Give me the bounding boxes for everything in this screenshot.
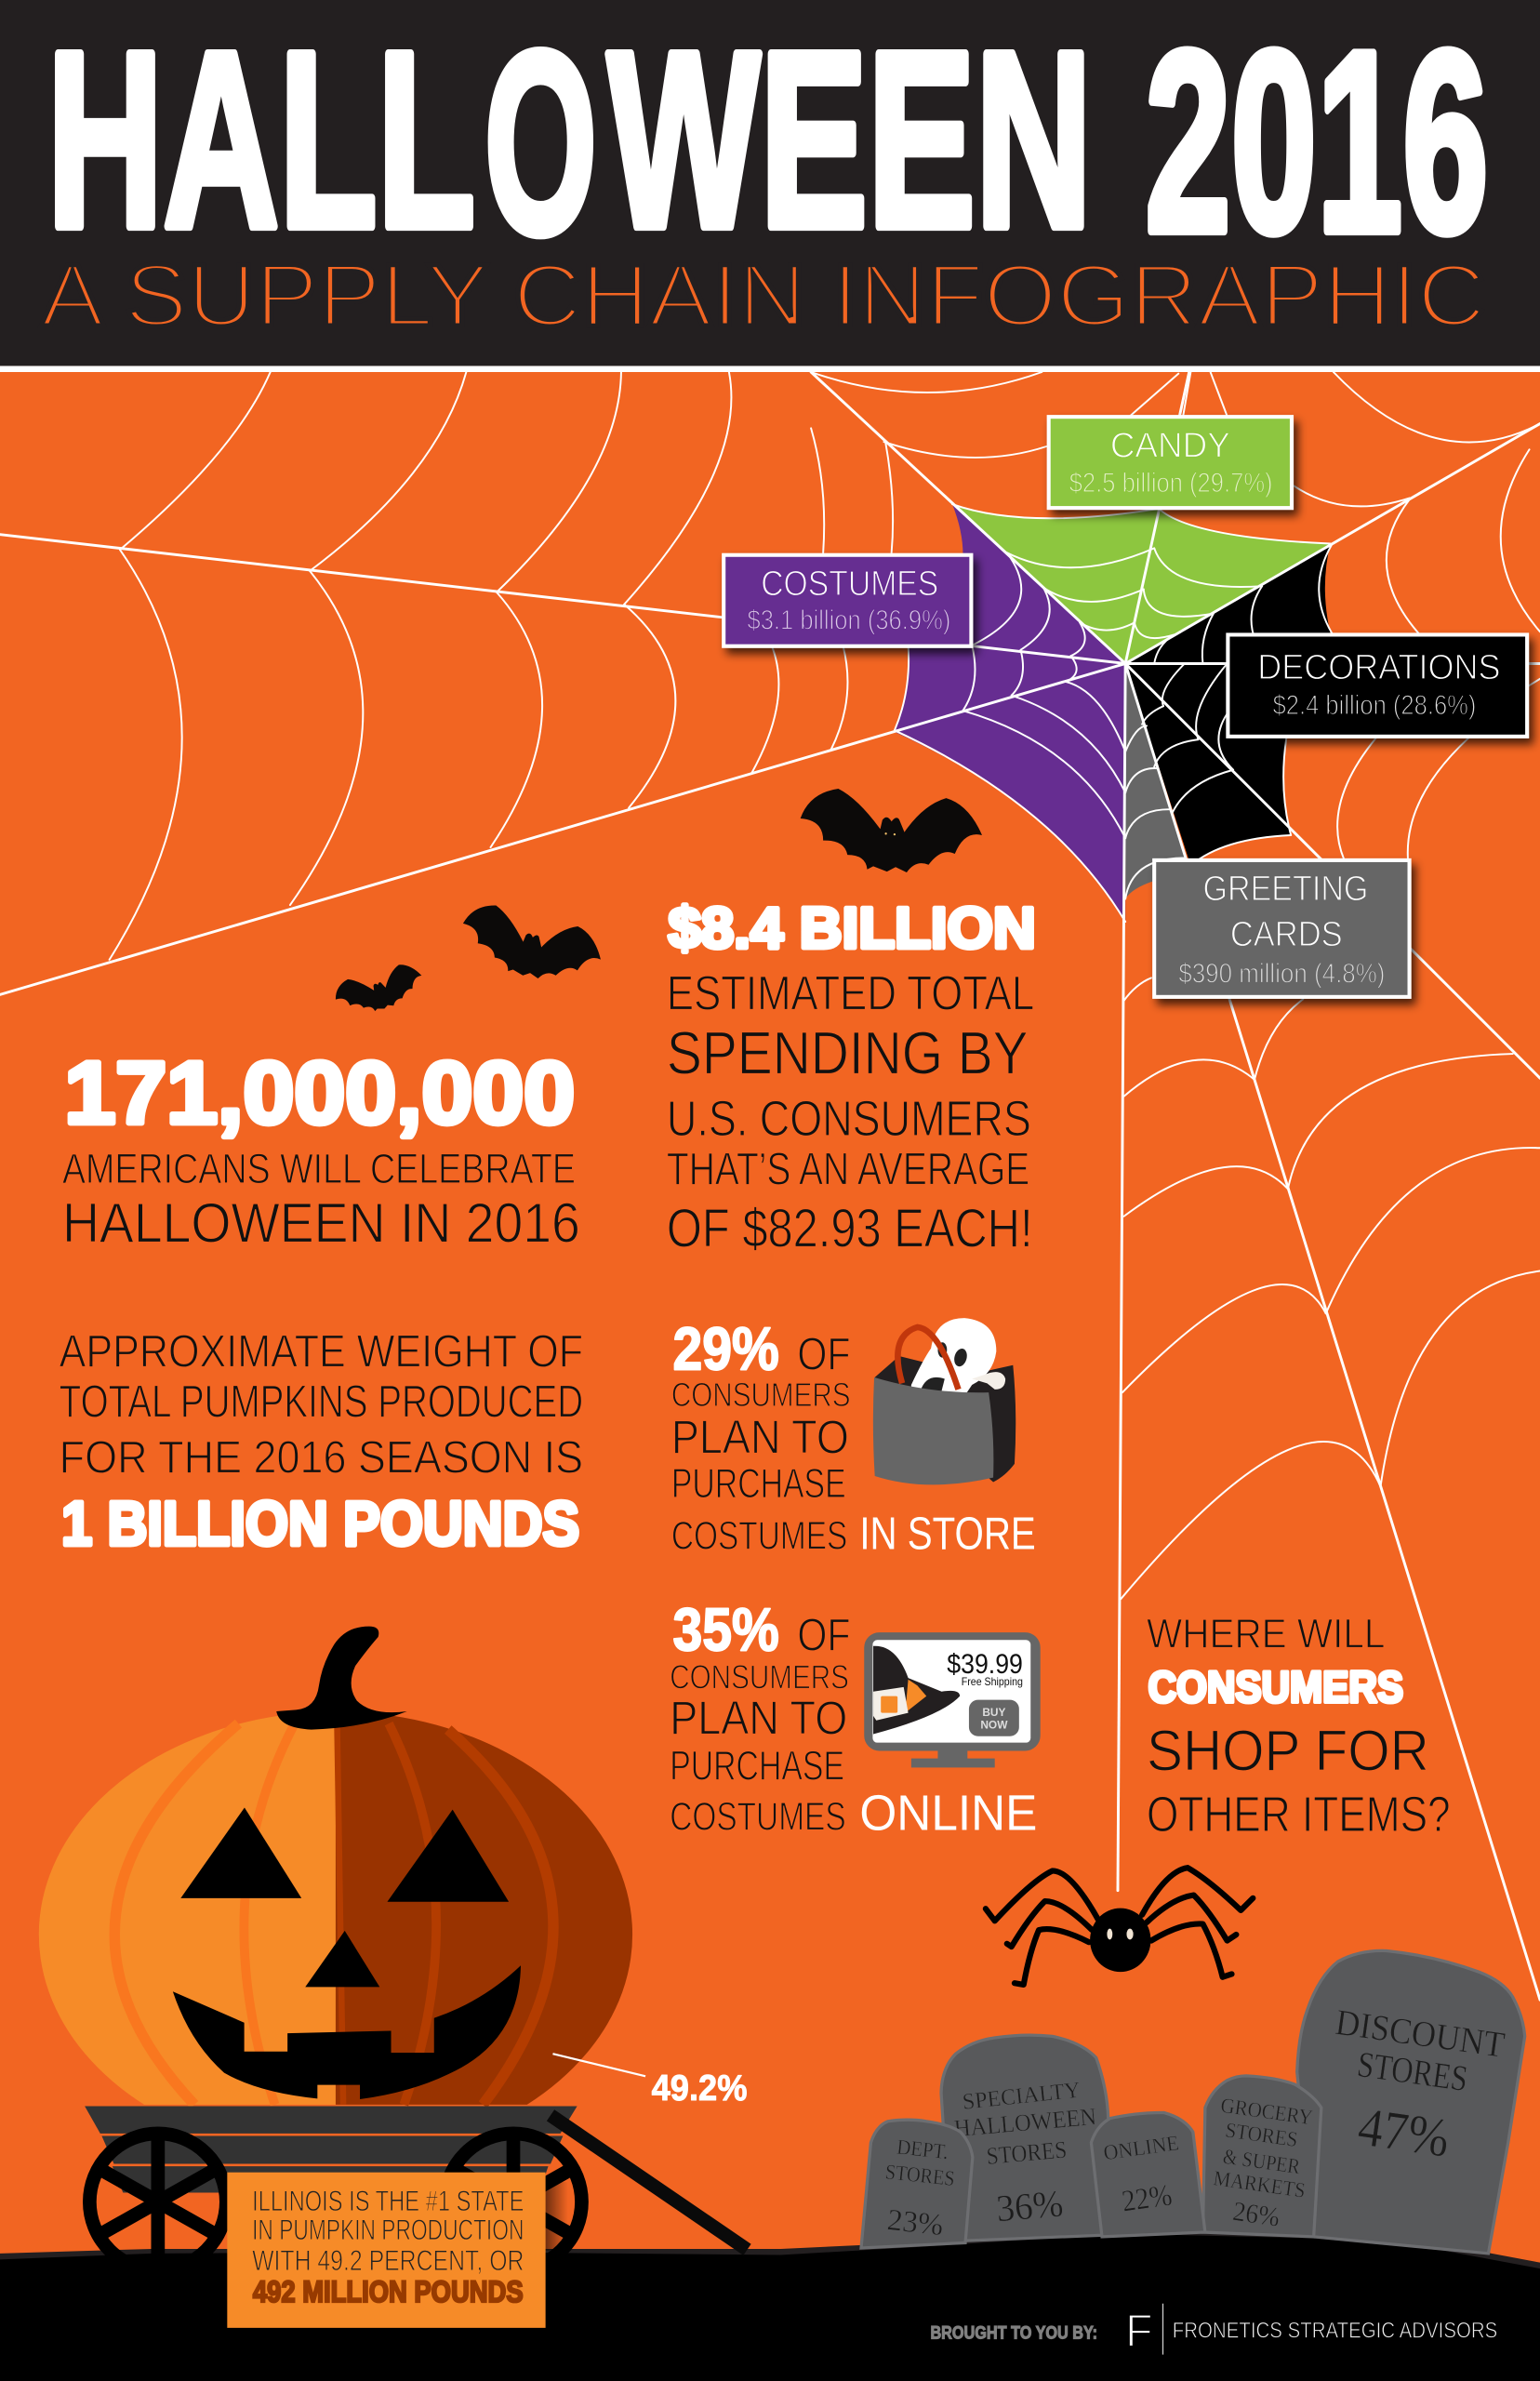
callout line and label: 49.2% — [552, 2054, 748, 2108]
category box: costumes — [724, 555, 971, 646]
stat: online costumes: OF — [797, 1611, 851, 1661]
tombstone: grocery stores and supermarkets: GROCERY — [1219, 2094, 1314, 2129]
stat: in store costumes: 29% — [672, 1315, 779, 1383]
buy now button: NOW — [980, 1719, 1008, 1732]
tombstone: specialty Halloween stores: STORES — [986, 2136, 1068, 2170]
tombstone: grocery stores and supermarkets: & SUPER — [1222, 2145, 1302, 2178]
callout: Illinois pumpkin production: WITH 49.2 PERCENT, OR — [252, 2244, 524, 2277]
stat: in store costumes: COSTUMES — [671, 1513, 847, 1557]
icon: small bat — [330, 954, 428, 1024]
title: HALL — [47, 0, 475, 280]
callout: Illinois pumpkin production: 492 MILLION POUNDS — [253, 2274, 524, 2308]
stat: total spending: OF $82.93 EACH! — [667, 1198, 1033, 1258]
web threads — [0, 372, 1540, 2000]
stat: in store costumes: PURCHASE — [671, 1461, 846, 1507]
subtitle: A SUPPLY CHAIN INFOGRAPHIC — [41, 246, 1485, 345]
category box: candy: CANDY — [1110, 425, 1230, 464]
tombstone: specialty Halloween stores: HALLOWEEN — [953, 2103, 1097, 2142]
stat: pumpkin weight: APPROXIMATE WEIGHT OF — [60, 1326, 583, 1377]
stat: total spending: $8.4 BILLION — [669, 897, 1036, 961]
category box: candy — [1049, 417, 1292, 508]
tombstone: grocery stores and supermarkets: STORES — [1224, 2118, 1299, 2151]
tombstone: department stores: 23% — [885, 2203, 945, 2242]
logo mark: F — [1125, 2306, 1153, 2356]
callout line and label: 49.2%: 49.2% — [652, 2068, 748, 2108]
stat: in store costumes: OF — [797, 1330, 851, 1380]
stat: online costumes — [670, 1596, 1037, 1841]
header banner — [0, 0, 1540, 372]
stat: Americans celebrating: 171,000,000 — [64, 1044, 575, 1142]
icon: trick-or-treat bag with ghost — [873, 1318, 1016, 1484]
stat: online costumes: PLAN TO — [670, 1691, 847, 1744]
category box: greeting cards: CARDS — [1230, 914, 1343, 953]
icon: computer monitor with witch hat ad: Free Shipping — [962, 1675, 1023, 1688]
icon: spider — [986, 1868, 1253, 1985]
tombstone: grocery stores and supermarkets: MARKETS — [1212, 2166, 1307, 2202]
question: where will consumers shop — [1147, 1611, 1451, 1842]
tombstone: department stores: STORES — [884, 2160, 956, 2190]
spider web with spending segments — [0, 372, 1540, 2000]
tombstone: discount stores: 47% — [1355, 2096, 1454, 2169]
segment fill: decorations — [1125, 543, 1334, 866]
category box: costumes: $3.1 billion (36.9%) — [748, 605, 950, 636]
tombstone: online: 22% — [1120, 2178, 1174, 2219]
tombstone: discount stores: STORES — [1355, 2044, 1470, 2099]
icon: jack-o-lantern pumpkin — [39, 1627, 632, 2105]
icon: computer monitor with witch hat ad — [864, 1632, 1041, 1767]
category box: decorations: DECORATIONS — [1257, 647, 1501, 686]
title — [47, 0, 1488, 288]
question: where will consumers shop: OTHER ITEMS? — [1147, 1787, 1451, 1842]
icon: large bat — [801, 789, 982, 872]
category box: decorations — [1228, 634, 1527, 737]
callout: Illinois pumpkin production — [227, 2173, 568, 2328]
tombstone: online: ONLINE — [1102, 2131, 1180, 2164]
stat: total spending: SPENDING BY — [667, 1018, 1029, 1086]
stat: online costumes: CONSUMERS — [670, 1658, 849, 1696]
stat: online costumes: 35% — [672, 1596, 779, 1664]
stat: online costumes: PURCHASE — [670, 1743, 844, 1789]
tombstone: grocery stores and supermarkets: 26% — [1231, 2197, 1281, 2233]
stat: total spending: THAT’S AN AVERAGE — [667, 1144, 1029, 1194]
category box: costumes: COSTUMES — [761, 564, 938, 603]
stat: pumpkin weight: TOTAL PUMPKINS PRODUCED — [60, 1377, 583, 1427]
stat: total spending: U.S. CONSUMERS — [667, 1091, 1031, 1147]
category box: greeting cards: GREETING — [1202, 869, 1368, 908]
tombstone: grocery stores and supermarkets — [1202, 2076, 1321, 2237]
stat: online costumes: COSTUMES — [670, 1794, 846, 1838]
tombstone: department stores: DEPT. — [896, 2135, 949, 2163]
buy now button: BUY — [982, 1706, 1006, 1719]
stat: total spending — [667, 897, 1036, 1258]
tombstone: specialty Halloween stores: 36% — [994, 2182, 1065, 2229]
tombstone: specialty Halloween stores: SPECIALTY — [962, 2078, 1082, 2115]
stat: in store costumes: PLAN TO — [671, 1410, 849, 1463]
category box: candy: $2.5 billion (29.7%) — [1069, 468, 1273, 499]
tombstone: specialty Halloween stores — [941, 2035, 1109, 2241]
question: where will consumers shop: WHERE WILL — [1147, 1611, 1385, 1656]
segment fill: greeting cards — [1125, 663, 1188, 899]
icon: medium bat — [457, 900, 606, 988]
title: WEEN — [607, 0, 1092, 280]
stat: in store costumes — [671, 1315, 1036, 1559]
tombstone: discount stores — [1297, 1950, 1525, 2254]
icon: computer monitor with witch hat ad: $39.99 — [947, 1649, 1023, 1680]
tombstone: discount stores: DISCOUNT — [1334, 2002, 1507, 2066]
question: where will consumers shop: CONSUMERS — [1148, 1663, 1403, 1712]
stat: pumpkin weight: FOR THE 2016 SEASON IS — [60, 1433, 583, 1483]
witch hat — [873, 1646, 960, 1734]
category box: decorations: $2.4 billion (28.6%) — [1273, 690, 1476, 721]
ground — [0, 2228, 1540, 2381]
left wheel — [89, 2134, 226, 2270]
stat: Americans celebrating: AMERICANS WILL CELEBRATE — [62, 1145, 576, 1192]
stat: in store costumes: IN STORE — [859, 1509, 1036, 1559]
stat: in store costumes: CONSUMERS — [671, 1376, 851, 1414]
footer credit — [930, 2304, 1497, 2356]
segment fill: candy — [952, 504, 1331, 663]
tombstone: online — [1091, 2112, 1205, 2237]
segment fill: costumes — [894, 504, 1125, 922]
icon: wagon — [85, 2106, 748, 2270]
right wheel — [445, 2134, 581, 2270]
callout: Illinois pumpkin production: ILLINOIS IS THE #1 STATE — [252, 2185, 524, 2217]
tombstone: department stores — [861, 2120, 973, 2248]
stat: Americans celebrating — [62, 1044, 580, 1255]
stat: pumpkin weight — [60, 1326, 583, 1559]
stat: online costumes: ONLINE — [859, 1785, 1037, 1841]
stat: Americans celebrating: HALLOWEEN IN 2016 — [62, 1191, 580, 1255]
title: O — [485, 0, 597, 288]
category box: greeting cards: $390 million (4.8%) — [1178, 958, 1385, 989]
category box: greeting cards — [1154, 860, 1410, 997]
question: where will consumers shop: SHOP FOR — [1147, 1720, 1429, 1784]
stat: pumpkin weight: 1 BILLION POUNDS — [61, 1489, 579, 1559]
callout: Illinois pumpkin production: IN PUMPKIN PRODUCTION — [252, 2214, 524, 2246]
footer credit: BROUGHT TO YOU BY: — [930, 2322, 1097, 2343]
buy now button — [969, 1700, 1019, 1736]
stat: total spending: ESTIMATED TOTAL — [667, 967, 1034, 1021]
